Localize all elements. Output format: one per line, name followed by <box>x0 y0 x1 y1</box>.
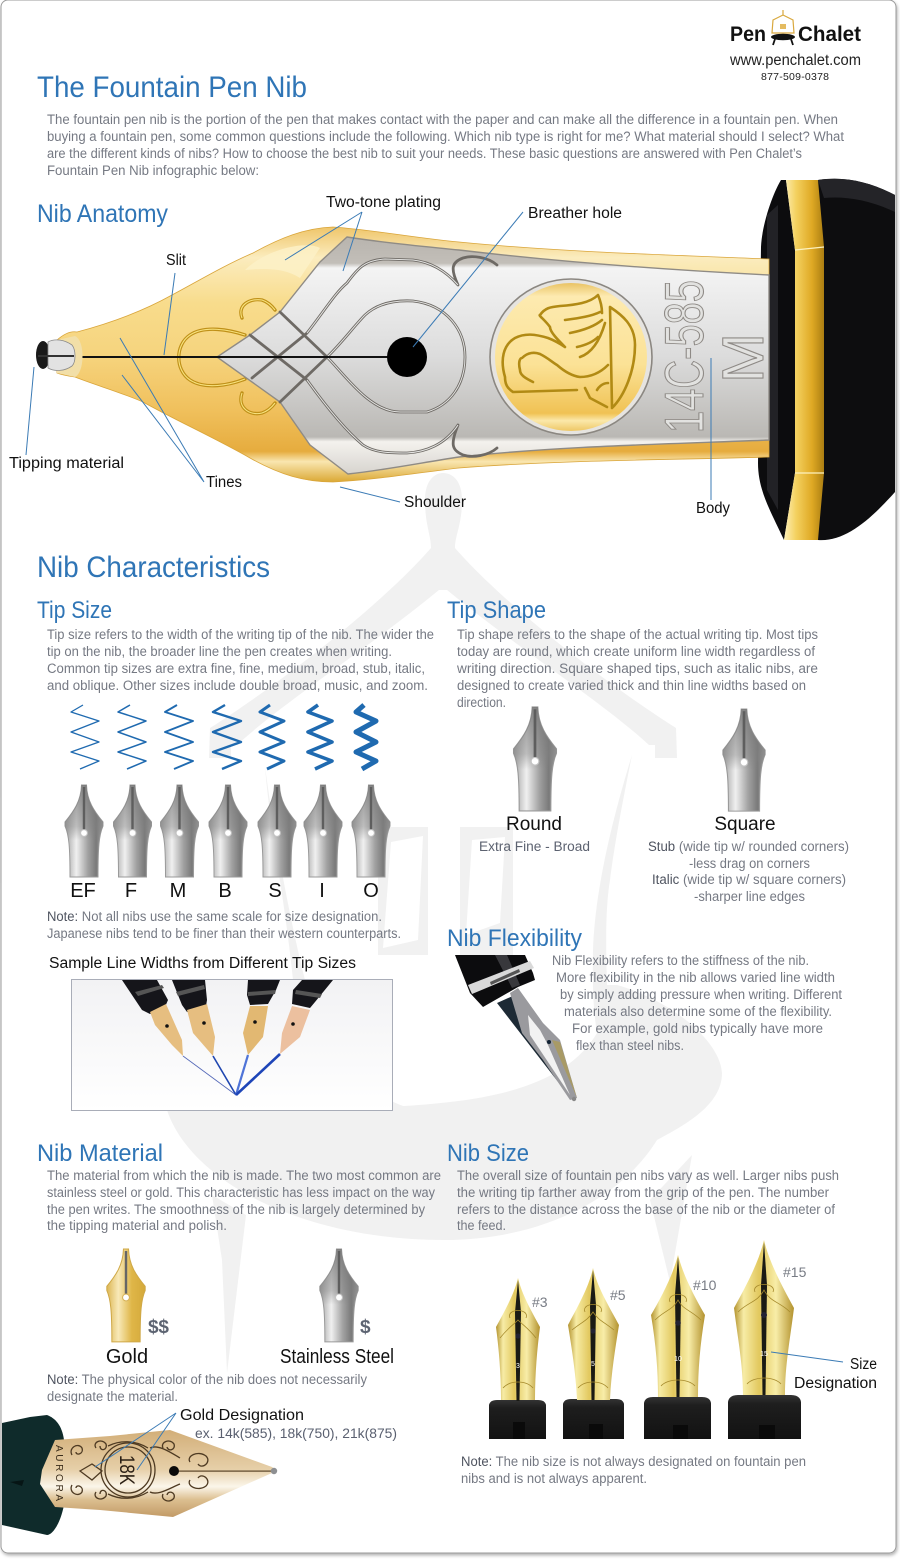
flexibility text: For example, gold nibs typically have more <box>572 1021 823 1036</box>
label: two-tone plating <box>285 194 441 271</box>
tip size text: Tip size refers to the width of the writing tip of the nib. The wider the <box>47 627 434 642</box>
square description: -sharper line edges <box>694 889 805 904</box>
photo: Aurora 18K nib: 18K <box>115 1455 138 1485</box>
material text: the tipping material and polish. <box>47 1218 227 1233</box>
logo: Pen Chalet: 877-509-0378 <box>761 71 829 83</box>
tip size text: Common tip sizes are extra fine, fine, medium, broad, stub, italic, <box>47 661 425 676</box>
intro text: are the different kinds of nibs? How to choose the best nib to suit your needs. These basic questions are answered with Pen Chalet’s <box>47 146 802 161</box>
nib #3 <box>489 1278 546 1439</box>
label: two-tone plating: Two-tone plating <box>326 194 441 211</box>
tip shape text: writing direction. Square shaped tips, such as italic nibs, are <box>456 661 818 676</box>
label: stainless steel: Stainless Steel <box>280 1346 394 1368</box>
line width zigzags <box>71 705 376 769</box>
material text <box>47 1168 441 1233</box>
nib size text <box>457 1168 839 1233</box>
nib anatomy illustration <box>36 179 895 540</box>
engraved ornament <box>250 257 497 456</box>
panel: nib material <box>2 1140 441 1535</box>
logo: Pen Chalet: Pen <box>730 23 766 46</box>
label: tines: Tines <box>206 474 242 491</box>
panel: tip size <box>37 597 434 1110</box>
highlight on shoulders <box>245 245 320 278</box>
icon: gold nib <box>107 1249 145 1342</box>
slit <box>40 356 390 358</box>
gold designation callout <box>95 1407 397 1470</box>
nib #15 <box>728 1240 801 1439</box>
tip shape text: designed to create varied thick and thin line widths based on <box>457 678 806 693</box>
price: steel: $ <box>360 1317 371 1338</box>
heading: Tip Shape: Tip Shape <box>447 597 546 624</box>
nib body <box>57 227 769 482</box>
heading: Nib Material: Nib Material <box>37 1140 163 1167</box>
material text: the pen writes. The smoothness of the nib is largely determined by <box>47 1202 425 1217</box>
size designation callout: Size <box>850 1356 877 1373</box>
nib engraving <box>653 280 776 433</box>
icon: round nib <box>514 707 556 811</box>
material text: The material from which the nib is made. The two most common are <box>47 1168 441 1183</box>
logo: Pen Chalet: Chalet <box>798 23 861 46</box>
heading: Nib Characteristics: Nib Characteristics <box>37 551 270 584</box>
icon: steel nib <box>320 1249 358 1342</box>
tip shape text: Tip shape refers to the shape of the actual writing tip. Most tips <box>457 627 818 642</box>
nib size note <box>461 1454 806 1486</box>
nib #5 <box>563 1268 624 1439</box>
size designation callout <box>771 1352 877 1392</box>
sample line widths heading: Sample Line Widths from Different Tip Sizes <box>49 955 356 972</box>
flexibility text: More flexibility in the nib allows varied line width <box>556 970 835 985</box>
nib size numbers <box>532 1264 807 1310</box>
tip size text <box>47 627 434 693</box>
tip size text: and oblique. Other sizes include double broad, music, and zoom. <box>47 678 428 693</box>
label: body: Body <box>696 500 730 517</box>
nib size numbers: #3 <box>532 1294 548 1310</box>
pen section and gold ring <box>758 179 895 540</box>
label: square: Square <box>714 814 776 835</box>
square description: Italic (wide tip w/ square corners) <box>652 872 846 887</box>
nib size text: the writing tip farther away from the grip of the pen. The number <box>457 1185 829 1200</box>
nib size numbers: #10 <box>693 1277 717 1293</box>
material note: Note: The physical color of the nib does not necessarily <box>47 1372 367 1387</box>
material text: stainless steel or gold. This characteristic has less impact on the way <box>47 1185 435 1200</box>
photo: flexible nib <box>455 955 577 1101</box>
heading: Tip Size: Tip Size <box>37 597 112 624</box>
note <box>47 909 401 941</box>
nib size labels: O <box>363 880 379 902</box>
title: The Fountain Pen Nib <box>37 71 307 104</box>
label: tines <box>120 338 242 491</box>
flexibility text: flex than steel nibs. <box>576 1038 684 1053</box>
tip shape text: direction. <box>457 695 506 710</box>
nib size numbers: #5 <box>610 1287 626 1303</box>
material note: designate the material. <box>47 1389 178 1404</box>
intro text <box>47 112 844 178</box>
flexibility text <box>552 953 842 1053</box>
nib #5: 5 <box>591 1361 595 1368</box>
panel: nib flexibility <box>447 925 842 1101</box>
icon: square nib <box>723 709 765 811</box>
nib size labels: EF <box>70 880 96 902</box>
intro text: buying a fountain pen, some common questions include the following. Which nib type is right for me? What material should I select? What <box>47 129 844 144</box>
flexibility text: materials also determine some of the flexibility. <box>564 1004 832 1019</box>
label: round: Round <box>506 814 562 835</box>
label: shoulder: Shoulder <box>404 494 466 511</box>
label: breather hole <box>413 205 622 347</box>
photo: sample line widths <box>72 980 392 1110</box>
label: breather hole: Breather hole <box>528 205 622 222</box>
flexibility text: Nib Flexibility refers to the stiffness of the nib. <box>552 953 809 968</box>
label: shoulder <box>340 487 466 511</box>
tip size text: tip on the nib, the broader line the pen creates when writing. <box>47 644 392 659</box>
nib size note: Note: The nib size is not always designated on fountain pen <box>461 1454 806 1469</box>
panel: tip shape <box>447 597 849 904</box>
gold engraved loops <box>179 300 275 414</box>
nib size labels: F <box>125 880 137 902</box>
nib #15: 15 <box>760 1351 768 1358</box>
nib size labels: M <box>170 880 186 902</box>
watermark: chalet logo <box>167 473 722 1373</box>
gold designation callout: Gold Designation <box>180 1407 304 1424</box>
round description: Extra Fine - Broad <box>479 839 590 854</box>
photo: Aurora 18K nib: AURORA <box>53 1445 64 1501</box>
emblem: swan <box>490 279 652 435</box>
nib engraving: M <box>711 333 776 383</box>
square description: -less drag on corners <box>689 856 810 871</box>
nib size text: the feed. <box>457 1218 506 1233</box>
heading: Nib Anatomy: Nib Anatomy <box>37 200 168 228</box>
square description: Stub (wide tip w/ rounded corners) <box>648 839 849 854</box>
tipping material <box>36 336 82 377</box>
nib size labels: I <box>319 880 325 902</box>
note: Note: Not all nibs use the same scale for size designation. <box>47 909 382 924</box>
price: gold: $$ <box>148 1317 169 1338</box>
logo: Pen Chalet <box>729 10 861 83</box>
heading: Nib Flexibility: Nib Flexibility <box>447 925 582 952</box>
tip shape text <box>456 627 818 710</box>
tip shape text: today are round, which create uniform line width regardless of <box>457 644 815 659</box>
intro text: Fountain Pen Nib infographic below: <box>47 163 259 178</box>
size designation callout: Designation <box>794 1375 877 1392</box>
note: Japanese nibs tend to be finer than their western counterparts. <box>47 926 401 941</box>
square description <box>648 839 849 904</box>
anatomy labels and leaders <box>9 194 730 517</box>
icon: chalet <box>771 10 795 45</box>
nib size note: nibs and is not always apparent. <box>461 1471 647 1486</box>
label: tipping material: Tipping material <box>9 455 124 472</box>
label: gold: Gold <box>106 1346 148 1368</box>
label: slit: Slit <box>166 252 187 269</box>
nib #10: 10 <box>674 1356 682 1363</box>
nib size text: refers to the distance across the base of the nib or the diameter of <box>457 1202 835 1217</box>
silver plating <box>217 237 769 474</box>
nib size numbers: #15 <box>783 1264 807 1280</box>
nib #3: 3 <box>516 1363 520 1370</box>
nib icons row <box>65 785 390 877</box>
photo: Aurora 18K nib <box>2 1415 277 1535</box>
gold designation callout: ex. 14k(585), 18k(750), 21k(875) <box>195 1426 397 1441</box>
nib #10 <box>644 1255 711 1439</box>
nib size labels <box>70 880 379 902</box>
nib size labels: B <box>218 880 232 902</box>
breather hole <box>387 337 427 377</box>
label: slit <box>164 252 187 355</box>
heading: Nib Size: Nib Size <box>447 1140 529 1167</box>
panel: nib size <box>447 1140 877 1486</box>
nib size text: The overall size of fountain pen nibs vary as well. Larger nibs push <box>457 1168 839 1183</box>
material note <box>47 1372 367 1404</box>
intro text: The fountain pen nib is the portion of the pen that makes contact with the paper and can make all the difference in a fountain pen. When <box>47 112 838 127</box>
label: tipping material <box>9 367 124 472</box>
nib engraving: 14C-585 <box>653 280 715 433</box>
nib size labels: S <box>268 880 282 902</box>
flexibility text: by simply adding pressure when writing. Different <box>560 987 842 1002</box>
logo: Pen Chalet: www.penchalet.com <box>729 52 861 69</box>
